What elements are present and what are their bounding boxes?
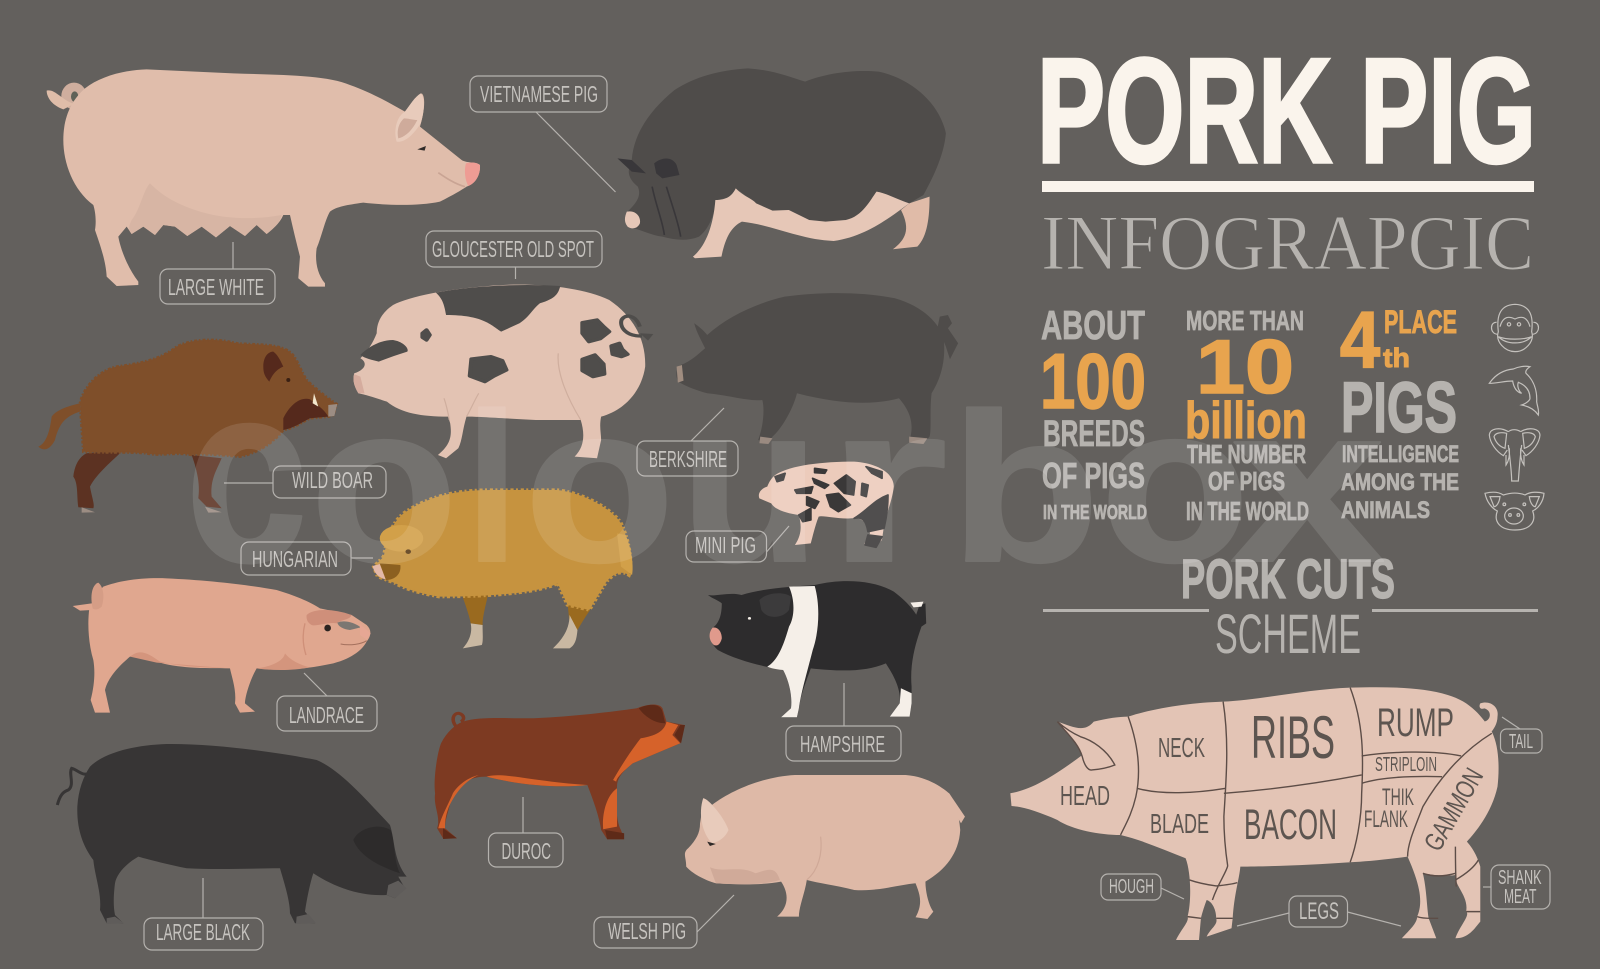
stat: 100 breeds: ABOUT — [1041, 302, 1145, 348]
label: hungarian — [241, 542, 373, 575]
label: tail: TAIL — [1509, 731, 1533, 753]
stat: 100 breeds: OF PIGS — [1042, 455, 1145, 496]
label: duroc: DUROC — [502, 838, 551, 864]
label: hampshire: HAMPSHIRE — [800, 731, 885, 757]
cut labels: THIK — [1382, 784, 1414, 811]
label: shank meat — [1483, 865, 1550, 909]
cut labels: STRIPLOIN — [1375, 754, 1437, 776]
pig: gloucester old spot — [353, 285, 653, 458]
subtitle: infograpgic: INFOGRAPGIC — [1041, 199, 1534, 286]
stat: 10 billion: billion — [1185, 392, 1307, 450]
stat: 100 breeds: 100 — [1040, 337, 1146, 425]
label: hampshire — [786, 683, 901, 761]
stat: 4th place: PLACE — [1384, 304, 1457, 340]
stat: 4th place: INTELLIGENCE — [1342, 441, 1459, 468]
stat: 10 billion: 10 — [1196, 325, 1294, 410]
label: hough: HOUGH — [1109, 876, 1154, 898]
label: hungarian: HUNGARIAN — [252, 546, 338, 572]
label: shank meat: MEAT — [1504, 886, 1536, 908]
heading: pork cuts: PORK CUTS — [1181, 547, 1395, 610]
stat: 10 billion — [1185, 305, 1309, 526]
label: shank meat: SHANK — [1498, 867, 1542, 889]
chart: pork cuts scheme pig — [1010, 687, 1499, 940]
pig: vietnamese — [617, 68, 946, 258]
label: gloucester old spot: GLOUCESTER OLD SPOT — [432, 236, 594, 262]
watermark: colourbox: c — [185, 331, 308, 616]
stat: 100 breeds: IN THE WORLD — [1043, 502, 1147, 524]
watermark: colourbox: l — [466, 369, 518, 606]
label: landrace — [277, 673, 377, 731]
watermark: colourbox: o — [1100, 357, 1250, 609]
icon: monkey — [1491, 304, 1538, 352]
label: welsh pig: WELSH PIG — [608, 918, 686, 944]
stat: 4th place: th — [1383, 343, 1410, 373]
label: landrace: LANDRACE — [289, 702, 364, 728]
icon: dolphin — [1489, 366, 1539, 415]
stat: 10 billion: OF PIGS — [1208, 466, 1285, 496]
pig: hampshire — [708, 581, 926, 717]
pig: welsh — [685, 775, 965, 919]
cut labels: FLANK — [1364, 806, 1408, 833]
pig: landrace — [73, 578, 371, 713]
pig: mini pig — [759, 462, 894, 547]
label: vietnamese pig — [470, 76, 616, 192]
icon: pig face — [1485, 492, 1544, 530]
label: large black: LARGE BLACK — [156, 919, 250, 945]
pig: hungarian — [373, 490, 633, 648]
stat: 4th place: PIGS — [1341, 369, 1457, 448]
stat: 4th place — [1340, 295, 1459, 524]
stat: 4th place: AMONG THE — [1341, 469, 1459, 496]
pig: wild boar — [38, 340, 337, 513]
label: large white: LARGE WHITE — [168, 274, 264, 300]
label: berkshire: BERKSHIRE — [649, 446, 727, 472]
label: wild boar: WILD BOAR — [292, 467, 373, 493]
watermark: colourbox: o — [524, 357, 675, 609]
label: legs — [1237, 896, 1401, 927]
label: legs: LEGS — [1299, 898, 1339, 925]
cut labels — [1060, 701, 1489, 856]
cut labels: GAMMON — [1418, 763, 1489, 856]
label: duroc — [488, 797, 563, 867]
stat: 100 breeds: BREEDS — [1043, 413, 1145, 454]
stat: 10 billion: IN THE WORLD — [1186, 496, 1309, 526]
pig: berkshire — [676, 293, 958, 444]
cut labels: BLADE — [1150, 808, 1209, 839]
watermark: colourbox — [185, 331, 1385, 616]
stat: 100 breeds — [1040, 302, 1147, 524]
cut labels: NECK — [1158, 732, 1205, 763]
label: mini pig — [686, 526, 789, 562]
heading rules — [1043, 609, 1538, 612]
cut labels: HEAD — [1060, 780, 1110, 811]
label: wild boar — [224, 466, 386, 498]
watermark: colourbox: u — [680, 357, 820, 609]
watermark: colourbox: o — [310, 357, 458, 609]
label: large white — [160, 242, 275, 304]
stat: 10 billion: THE NUMBER — [1187, 439, 1306, 469]
label: berkshire — [637, 408, 738, 476]
watermark: colourbox: r — [826, 357, 948, 609]
cut labels: RIBS — [1251, 704, 1335, 771]
watermark: colourbox: b — [950, 369, 1100, 606]
heading: scheme: SCHEME — [1215, 602, 1361, 665]
pig: large white — [47, 69, 480, 287]
label: vietnamese pig: VIETNAMESE PIG — [480, 81, 598, 107]
cut labels: RUMP — [1377, 701, 1454, 745]
title rule — [1042, 181, 1534, 192]
stat: 4th place: ANIMALS — [1341, 497, 1430, 524]
label: welsh pig — [594, 895, 734, 948]
label: gloucester old spot — [426, 231, 602, 279]
stat: 10 billion: MORE THAN — [1186, 305, 1304, 336]
pig: large black — [57, 744, 407, 924]
label: large black — [144, 878, 263, 950]
icon: elephant — [1489, 429, 1540, 481]
stat: 4th place: 4 — [1340, 295, 1380, 384]
label: mini pig: MINI PIG — [695, 532, 756, 558]
cut labels: BACON — [1244, 801, 1337, 849]
pig: duroc — [435, 704, 685, 839]
label: tail — [1500, 717, 1542, 753]
watermark: colourbox: x — [1230, 357, 1385, 609]
